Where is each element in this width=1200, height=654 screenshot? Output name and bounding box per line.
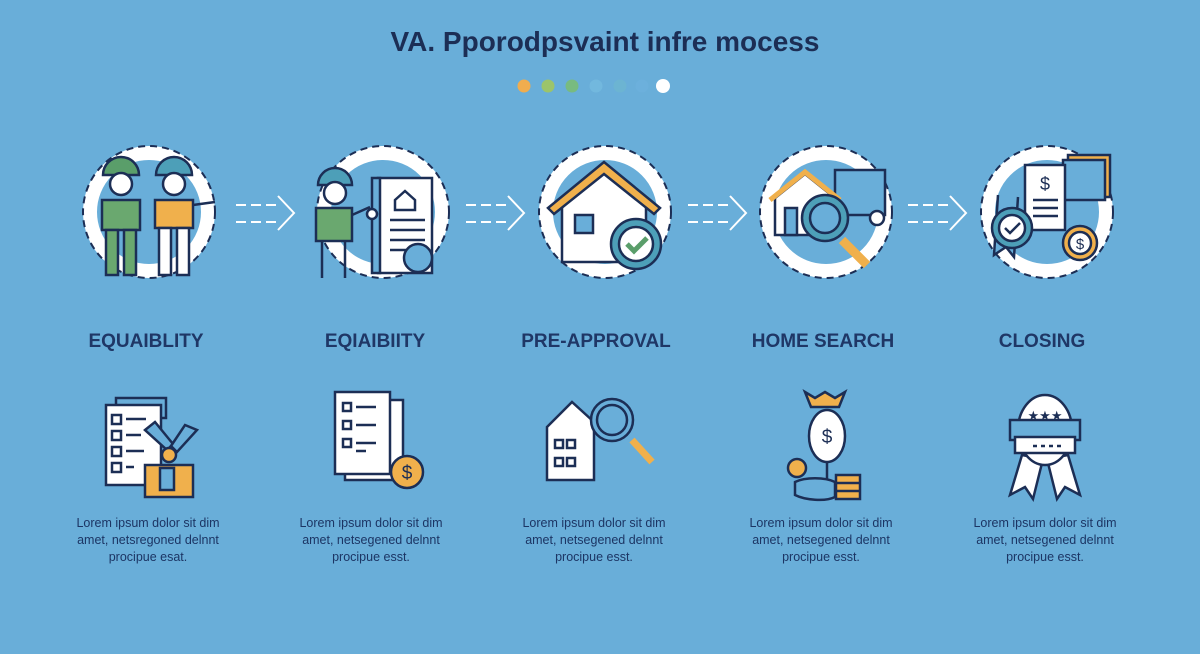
bottom icon 5: award ribbon: ★★★ — [1028, 408, 1062, 423]
description texts: procipue esst. — [332, 550, 410, 564]
title: VA. Pporodpsvaint infre mocess — [391, 26, 819, 57]
bottom icon 1: checklist with tool — [106, 398, 197, 497]
step 4 circle icon: home search — [760, 146, 892, 278]
description texts: procipue esst. — [782, 550, 860, 564]
arrow 3 — [688, 196, 746, 230]
bottom icon 4: money bag and coins: $ — [822, 427, 833, 448]
step labels — [88, 331, 1085, 352]
step labels: PRE-APPROVAL — [521, 331, 671, 352]
step 1 circle icon: workers — [83, 146, 215, 278]
description texts: procipue esat. — [109, 550, 187, 564]
step 5 circle icon: closing documents: $ — [1040, 174, 1050, 194]
description texts — [76, 516, 1117, 564]
description texts: Lorem ipsum dolor sit dim — [973, 516, 1117, 530]
step labels: HOME SEARCH — [752, 331, 894, 352]
step labels: CLOSING — [999, 331, 1085, 352]
description texts: procipue esst. — [555, 550, 633, 564]
bottom icon 3: house with magnifier — [547, 399, 652, 480]
description texts: Lorem ipsum dolor sit dim — [76, 516, 220, 530]
step 2 circle icon: inspector with document — [316, 146, 449, 278]
description texts: amet, netsegened delnnt — [752, 533, 890, 547]
bottom icon 4: money bag and coins — [788, 392, 860, 500]
arrow 2 — [466, 196, 524, 230]
description texts: amet, netsegened delnnt — [525, 533, 663, 547]
bottom icon 2: documents with dollar — [335, 392, 423, 488]
description texts: procipue esst. — [1006, 550, 1084, 564]
step labels: EQUAIBLITY — [88, 331, 204, 352]
description texts: amet, netsregoned delnnt — [77, 533, 219, 547]
arrow 4 — [908, 196, 966, 230]
bottom icon 5: award ribbon — [1010, 395, 1080, 499]
description texts: amet, netsegened delnnt — [302, 533, 440, 547]
description texts: Lorem ipsum dolor sit dim — [749, 516, 893, 530]
bottom icon 2: documents with dollar: $ — [402, 463, 413, 484]
description texts: Lorem ipsum dolor sit dim — [299, 516, 443, 530]
progress dots — [518, 79, 670, 93]
description texts: Lorem ipsum dolor sit dim — [522, 516, 666, 530]
step 5 circle icon: closing documents — [981, 146, 1113, 278]
step 5 circle icon: closing documents: $ — [1076, 236, 1085, 253]
arrow 1 — [236, 196, 294, 230]
step labels: EQIAIBIITY — [325, 331, 425, 352]
step 3 circle icon: house with check — [539, 146, 671, 278]
description texts: amet, netsegened delnnt — [976, 533, 1114, 547]
